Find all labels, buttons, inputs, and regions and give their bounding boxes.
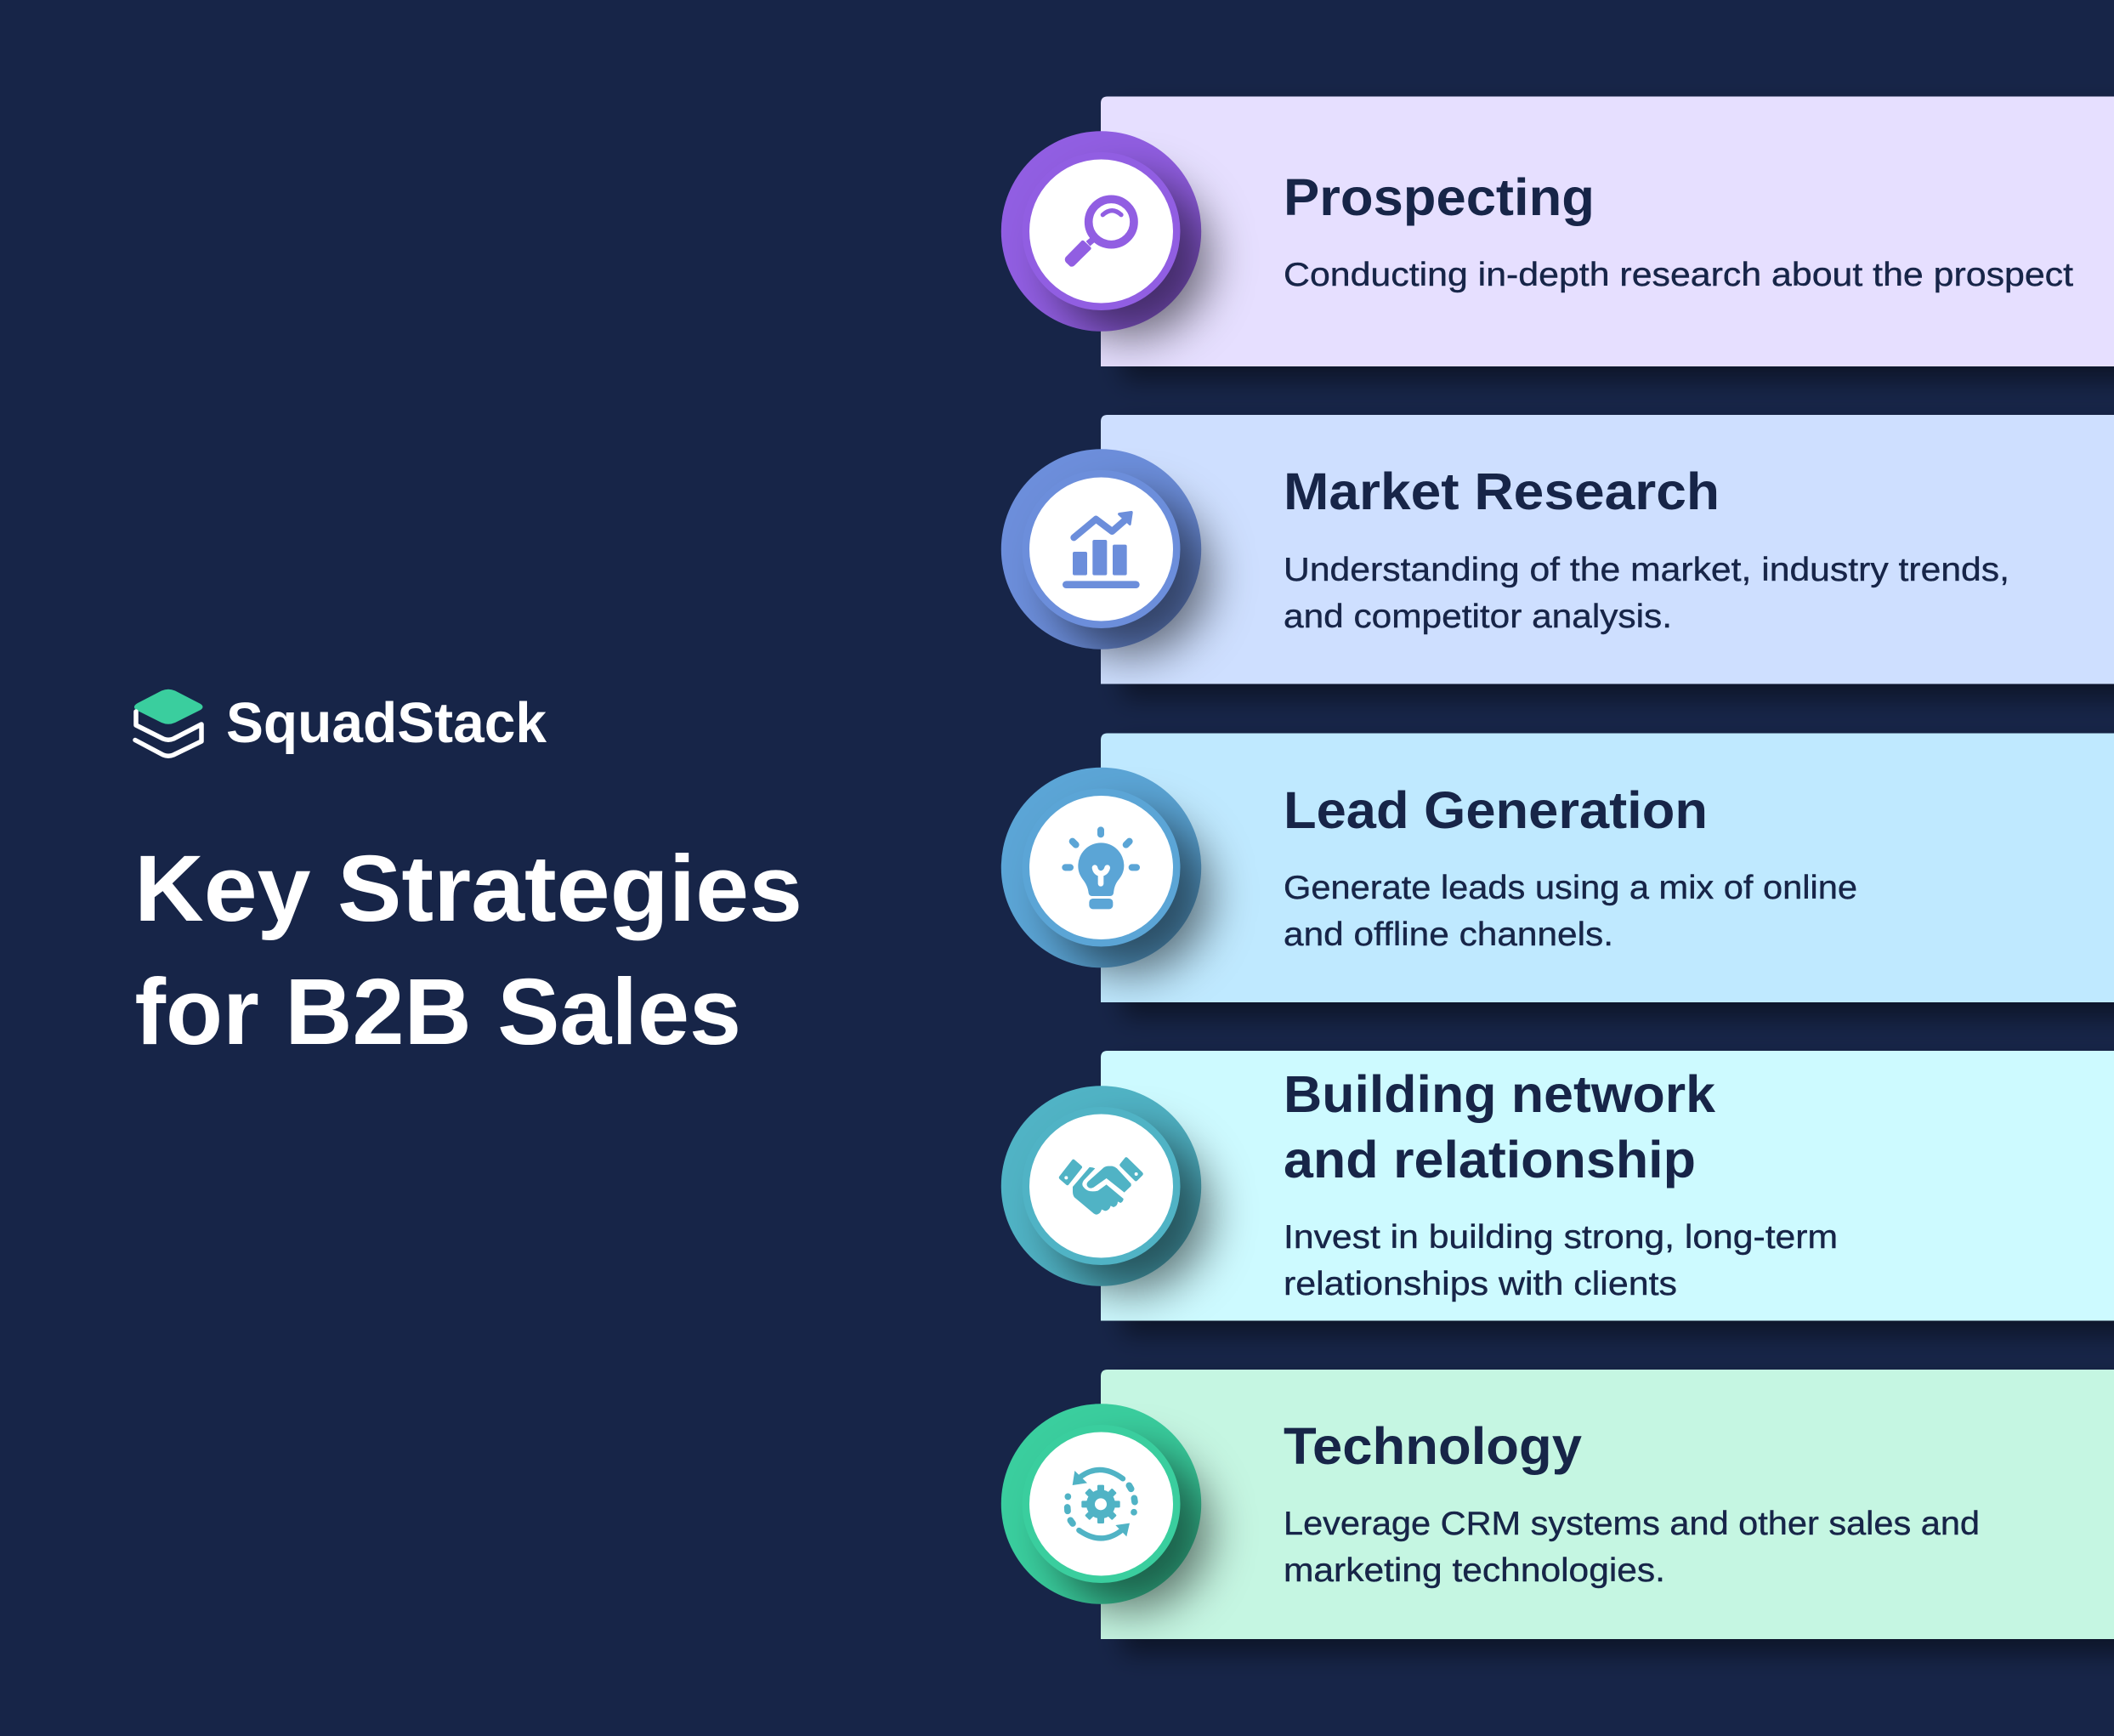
panel: Lead Generation bbox=[1001, 733, 2114, 1017]
card shadow bbox=[1122, 110, 2114, 380]
description: and competitor analysis. bbox=[1284, 599, 1672, 635]
card shadow bbox=[1122, 428, 2114, 698]
heading: Market Research bbox=[1284, 462, 1720, 520]
description: Generate leads using a mix of online bbox=[1284, 870, 1857, 906]
description: Invest in building strong, long-term bbox=[1284, 1219, 1838, 1256]
heading: Technology bbox=[1284, 1417, 1582, 1475]
icon: light bulb bbox=[1065, 830, 1136, 909]
card background bbox=[1101, 1370, 2114, 1639]
heading: Lead Generation bbox=[1284, 781, 1708, 839]
card shadow bbox=[1122, 1383, 2114, 1654]
icon: handshake bbox=[1059, 1157, 1143, 1215]
icon: growth chart bbox=[1063, 511, 1140, 588]
description: and offline channels. bbox=[1284, 916, 1613, 953]
card background bbox=[1101, 415, 2114, 684]
card background bbox=[1101, 97, 2114, 366]
description bbox=[1284, 1219, 1838, 1302]
panel: Prospecting bbox=[1001, 97, 2114, 380]
heading: Prospecting bbox=[1284, 168, 1595, 226]
icon: magnifying glass bbox=[1065, 199, 1134, 267]
title: Key Strategies bbox=[134, 837, 802, 941]
badge bbox=[1001, 1404, 1210, 1610]
card background bbox=[1101, 733, 2114, 1002]
panel: Building network and relationship bbox=[1001, 1051, 2114, 1335]
description bbox=[1284, 1506, 1980, 1589]
heading: and relationship bbox=[1284, 1131, 1696, 1189]
description: relationships with clients bbox=[1284, 1266, 1677, 1302]
description: Leverage CRM systems and other sales and bbox=[1284, 1506, 1980, 1542]
description: marketing technologies. bbox=[1284, 1552, 1665, 1589]
description: Conducting in-depth research about the prospect bbox=[1284, 257, 2073, 293]
logo: SquadStack bbox=[134, 689, 547, 756]
badge bbox=[1001, 449, 1210, 655]
card background bbox=[1101, 1051, 2114, 1321]
card shadow bbox=[1122, 746, 2114, 1017]
icon: gear with rotating arrows bbox=[1068, 1470, 1135, 1538]
heading bbox=[1284, 1065, 1715, 1189]
card shadow bbox=[1122, 1064, 2114, 1335]
badge bbox=[1001, 1086, 1210, 1292]
logo wordmark: SquadStack bbox=[226, 691, 547, 755]
description bbox=[1284, 552, 2009, 635]
panel: Market Research bbox=[1001, 415, 2114, 698]
description: Understanding of the market, industry trends, bbox=[1284, 552, 2009, 588]
heading: Building network bbox=[1284, 1065, 1715, 1123]
badge bbox=[1001, 768, 1210, 974]
icon: stacked layers bbox=[134, 689, 202, 756]
panel: Technology bbox=[1001, 1370, 2114, 1654]
title bbox=[134, 837, 802, 1064]
title: for B2B Sales bbox=[134, 960, 741, 1064]
badge bbox=[1001, 131, 1210, 338]
description bbox=[1284, 870, 1857, 953]
